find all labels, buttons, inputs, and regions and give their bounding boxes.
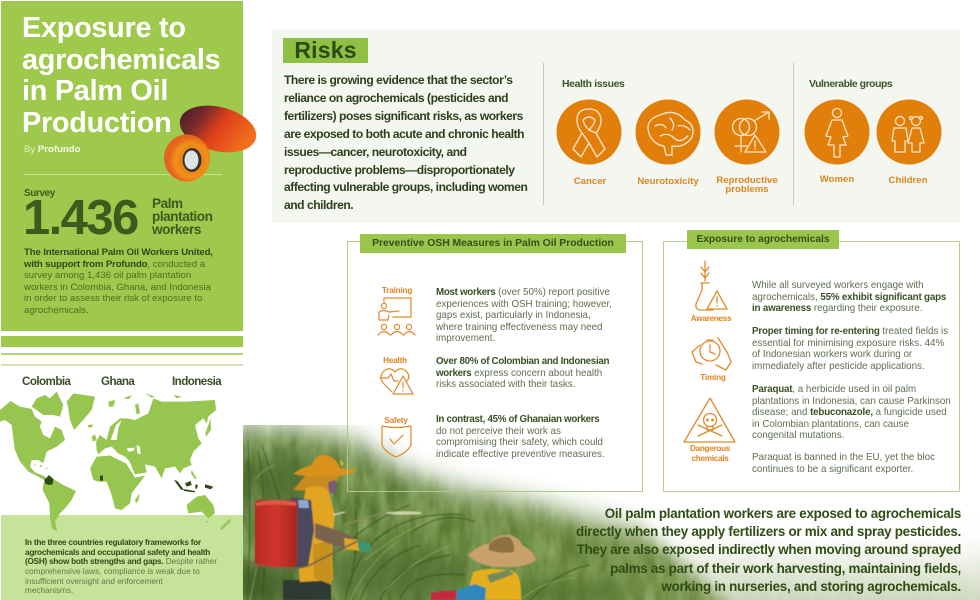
regulatory text block: In the three countries regulatory frameworks for (25, 538, 201, 547)
awareness text: agrochemicals, 55% exhibit significant gaps (752, 292, 946, 303)
health text: Over 80% of Colombian and Indonesian (436, 356, 609, 367)
survey description: survey among 1,436 oil palm plantation (24, 270, 191, 281)
chemicals text: congenital mutations. (752, 430, 844, 441)
icons: OSH measures (377, 297, 416, 458)
regulatory text block: (OSH) show both strengths and gaps. Despite rather (25, 557, 217, 566)
world map (0, 392, 231, 532)
icon: training (378, 298, 415, 335)
timing text: Proper timing for re-entering treated fields is (752, 326, 948, 337)
survey description: with support from Profundo, conducted a (24, 259, 205, 270)
regulatory text block: insufficient oversight and enforcement (25, 577, 163, 586)
chemicals text: plantations in Indonesia, can cause Parkinson (752, 396, 951, 407)
health text: workers express concern about health (436, 368, 602, 379)
risks paragraph: reliance on agrochemicals (pesticides and (284, 91, 508, 105)
map country labels: Indonesia (172, 375, 221, 388)
survey description (24, 247, 213, 316)
survey unit label: plantation (152, 209, 212, 224)
icon label: Children: Children (889, 175, 927, 186)
survey description: workers in Colombia, Ghana, and Indonesia (24, 282, 211, 293)
icon: skull warning (684, 398, 735, 442)
regulatory text block: mechanisms. (25, 586, 73, 595)
training text: gaps exist, particularly in Indonesia, (436, 310, 591, 321)
icon label: Women: Women (820, 174, 854, 185)
light green text band (1, 515, 243, 600)
chemicals text: in Colombian plantations, can cause (752, 419, 909, 430)
survey description: The International Palm Oil Workers United, (24, 247, 213, 258)
awareness text: in awareness regarding their exposure. (752, 303, 922, 314)
panel: exposure to agrochemicals (663, 241, 960, 492)
timing text (752, 326, 948, 372)
training text: experiences with OSH training; however, (436, 299, 612, 310)
icon label: Cancer: Cancer (574, 176, 606, 187)
title: in Palm Oil (22, 75, 168, 107)
label: Awareness: Awareness (691, 314, 731, 323)
risks paragraph: and children. (284, 198, 353, 212)
panel: map section (0, 392, 243, 600)
panel: OSH measures (347, 241, 643, 492)
safety text: indicate effective preventive measures. (436, 449, 605, 460)
training text (436, 287, 612, 344)
panel: left green title panel (1, 1, 243, 331)
title (22, 12, 220, 139)
label: Dangerous chemicals (690, 444, 730, 462)
panel: risks (272, 29, 960, 223)
chemicals text: Paraquat, a herbicide used in oil palm (752, 384, 916, 395)
survey unit label: workers (152, 222, 201, 237)
safety text: In contrast, 45% of Ghanaian workers (436, 414, 599, 425)
icon: shield (382, 426, 411, 457)
map country labels (22, 375, 222, 388)
big number: 1.436: 1.436 (23, 191, 138, 245)
callout: exposure summary (576, 506, 961, 594)
training text: Most workers (over 50%) report positive (436, 287, 610, 298)
icon label: Reproductive problems (716, 175, 778, 195)
risks paragraph: affecting vulnerable groups, including women (284, 180, 527, 194)
heading: Exposure to agrochemicals (687, 230, 839, 249)
icon: woman (826, 108, 848, 157)
icon label: Neurotoxicity: Neurotoxicity (637, 176, 699, 187)
survey description: in order to assess their risk of exposure to (24, 293, 202, 304)
label: Dangerous chemicals: chemicals (692, 454, 728, 462)
training text: where training effectiveness may need (436, 322, 602, 333)
label: Training: Training (382, 286, 412, 295)
highlighted countries (44, 475, 103, 485)
survey description: agrochemicals. (24, 305, 89, 316)
icon: stopwatch in hand (692, 338, 731, 370)
risks paragraph: issues—cancer, neurotoxicity, and (284, 145, 467, 159)
heading: Preventive OSH Measures: Preventive OSH Measures in Palm Oil Production (372, 238, 614, 249)
ban text: continues to be a significant exporter. (752, 464, 913, 475)
callout: exposure summary: palms as part of their work harvesting, maintaining fields, (610, 561, 961, 576)
photo: workers spraying pesticides in palm plantation (243, 425, 980, 600)
icons: exposure (683, 260, 736, 443)
ban text (752, 452, 935, 475)
risks paragraph (284, 73, 528, 212)
icon: heart and warning (380, 369, 413, 394)
label: Timing: Timing (700, 373, 726, 382)
survey label: Survey (24, 188, 55, 199)
byline: By Profundo (24, 144, 81, 155)
training text: improvement. (436, 333, 495, 344)
title: agrochemicals (22, 44, 220, 76)
risks paragraph: There is growing evidence that the sector’s (284, 73, 512, 87)
awareness text: While all surveyed workers engage with (752, 280, 924, 291)
timing text: of Indonesian workers work during or (752, 349, 912, 360)
risks paragraph: fertilizers) poses significant risks, as workers (284, 109, 523, 123)
icon label: Reproductive problems: problems (725, 184, 769, 195)
heading: Risks: Risks (294, 37, 357, 63)
safety text: do not perceive their work as (436, 426, 561, 437)
map country labels: Ghana (101, 375, 134, 388)
regulatory text block: agrochemicals and occupational safety and health (25, 548, 210, 557)
icon: gender symbols and warning (732, 112, 769, 152)
survey unit label (152, 196, 212, 237)
timing text: immediately after pesticide applications. (752, 361, 925, 372)
title: Exposure to (22, 12, 186, 44)
heading: Preventive OSH Measures (360, 234, 626, 253)
callout: exposure summary: working in nurseries, and storing agrochemicals. (661, 579, 961, 594)
icon: ribbon (573, 109, 605, 157)
heading: Vulnerable groups: Vulnerable groups (809, 79, 892, 90)
risks paragraph: reproductive problems—disproportionately (284, 163, 515, 177)
timing text: essential for minimising exposure risks. 44% (752, 338, 944, 349)
callout: exposure summary: They are also exposed indirectly when moving around sprayed (577, 542, 961, 557)
map country labels: Colombia (22, 375, 70, 388)
survey unit label: Palm (152, 196, 183, 211)
decorative stripe block (1, 336, 243, 347)
safety text (436, 414, 605, 460)
heading: Exposure to agrochemicals: Exposure to agrochemicals (696, 234, 830, 245)
callout: exposure summary: Oil palm plantation workers are exposed to agrochemicals (605, 506, 961, 521)
ban text: Paraquat is banned in the EU, yet the bloc (752, 452, 935, 463)
icon: brain (648, 112, 693, 155)
figure: second worker in straw hat (431, 535, 536, 600)
regulatory text block: comprehensive laws, compliance is weak due to (25, 567, 200, 576)
icon: palm fruits (164, 106, 256, 182)
icons: health and vulnerable circles (556, 100, 942, 164)
label: Dangerous chemicals: Dangerous (690, 444, 730, 453)
chemicals text: disease; and tebuconazole, a fungicide used (752, 407, 947, 418)
label: Safety: Safety (384, 416, 408, 425)
awareness text (752, 280, 946, 314)
risks paragraph: are exposed to both acute and chronic health (284, 127, 524, 141)
icon label: Reproductive problems: Reproductive (716, 175, 778, 186)
health text: risks associated with their tasks. (436, 379, 575, 390)
icon: children (892, 116, 924, 152)
callout: exposure summary: directly when they apply fertilizers or mix and spray pesticides. (576, 524, 961, 539)
chemicals text (752, 384, 951, 441)
title: Production (22, 107, 171, 139)
icon: flask and wheat (696, 261, 727, 310)
label: Health: Health (383, 356, 407, 365)
fog fade (243, 425, 980, 555)
safety text: compromising their safety, which could (436, 437, 603, 448)
heading: Health issues: Health issues (562, 79, 624, 90)
regulatory text block (25, 538, 217, 595)
figure: worker with red backpack sprayer (243, 455, 422, 600)
health text (436, 356, 609, 390)
